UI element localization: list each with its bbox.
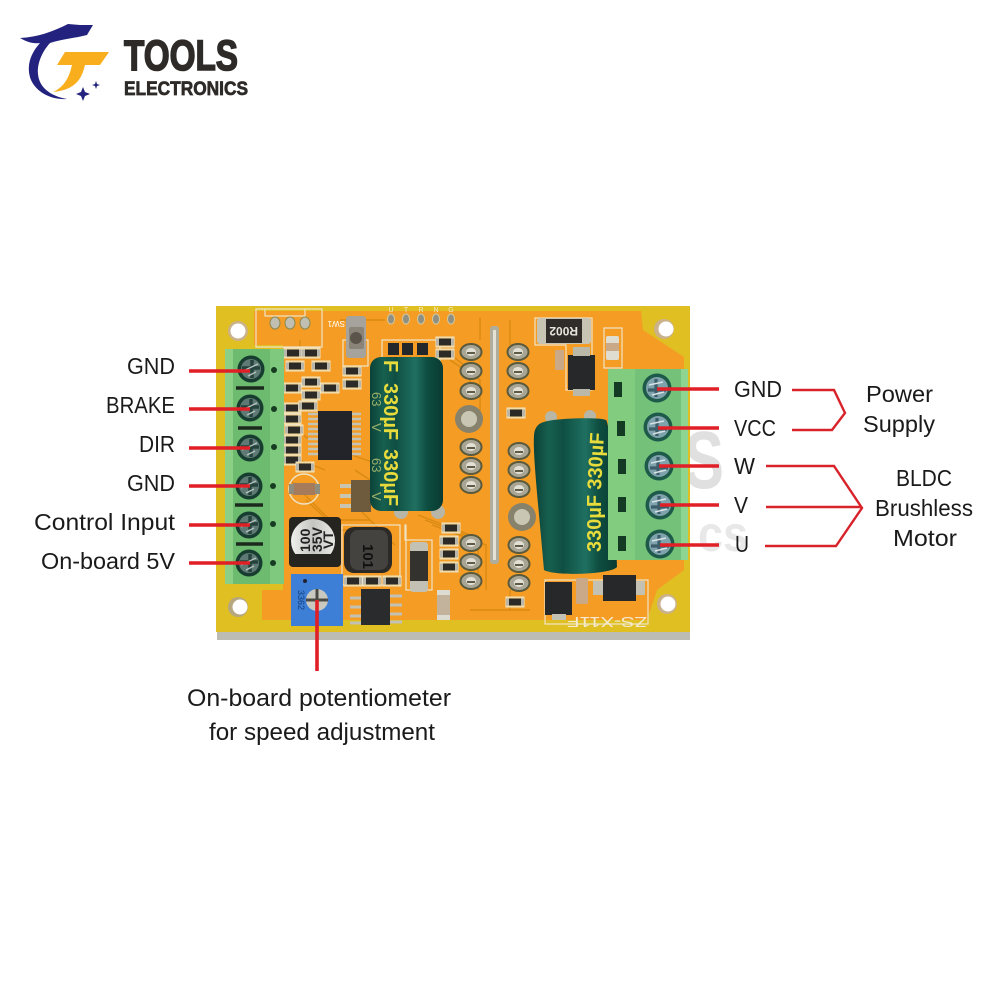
board orange copper area [254,311,684,620]
left pin labels: GND [127,353,175,379]
capacitor 330uF left: 63 [369,392,384,406]
left pin labels: On-board 5V [41,548,175,574]
blue potentiometer [291,574,343,626]
board metal edge [217,626,690,640]
potentiometer label: for speed adjustment [209,719,435,746]
mounting holes [228,319,677,617]
blue potentiometer: 3362 [296,590,306,610]
right pin labels: V [734,492,748,518]
watermark text behind board: S [684,415,724,506]
BLDC motor label: Motor [893,525,957,551]
right pointer lines [657,389,719,545]
capacitor 330uF right [534,410,617,574]
small SMD components [283,337,525,607]
motor bracket [765,466,862,546]
capacitor 330uF left: 63 [369,458,384,472]
potentiometer pointer line [315,600,319,671]
right green screw terminal [608,369,688,560]
logo icon: orange T [53,52,109,92]
potentiometer label [187,685,451,746]
solder pads column right of wire [508,344,536,591]
header pads and labels top: R [418,307,424,314]
watermark text behind board [684,415,748,562]
vertical shunt wire [490,326,499,564]
left pin labels [34,353,175,574]
solder pads column left of wire [455,344,483,589]
right pin labels [734,376,782,557]
tact switch: SW1 [327,319,345,328]
capacitor 330uF left: 330µF [379,383,401,440]
bottom diodes [545,575,645,620]
power inductor 101 [344,527,392,573]
PCB mark ZS-X11F: ZS-X11F [567,613,647,630]
capacitor 330uF left: 330µF [379,449,401,506]
small transistors row [388,343,428,355]
BLDC motor label: BLDC [896,465,952,491]
left green screw terminal [225,349,284,584]
power supply bracket [792,390,845,430]
left pointer lines [189,371,250,563]
logo: Tools Electronics [20,24,248,101]
left pin labels: BRAKE [106,392,175,418]
capacitor 330uF left: V [369,492,384,501]
logo wordmark: TOOLS: TOOLS [124,32,238,80]
diode SMD [410,542,428,592]
BLDC motor label: Brushless [875,495,973,521]
header pads and labels top: U [388,307,394,314]
capacitor 330uF right: 330µF [584,432,609,490]
capacitor 330uF left [369,357,445,519]
right pin labels: W [734,453,756,479]
3-pin pads top left [270,317,310,329]
potentiometer label: On-board potentiometer [187,685,451,712]
ceramic capacitor top [606,336,619,360]
right pin labels: GND [734,376,782,402]
power inductor 101: 101 [359,544,376,569]
left pin labels: Control Input [34,509,175,535]
header pads and labels top: G [448,307,454,314]
right pin labels: VCC [734,415,776,441]
logo icon: blue swoosh [20,24,93,99]
capacitor 330uF right: 330µF [584,495,606,552]
silkscreen outlines [256,309,648,624]
circuit board [216,306,690,640]
left pin labels: DIR [139,431,175,457]
board traces [290,318,530,610]
small ring capacitor [289,474,320,504]
tab transistor [340,480,371,512]
electrolytic capacitor 100 35V: 100 [297,528,313,552]
capacitor 330uF left: V [369,423,384,432]
power supply label [863,381,935,437]
power supply label: Power [866,381,933,407]
SOP8 IC bottom [350,589,402,625]
power transistor top [568,347,595,396]
electrolytic capacitor 100 35V [289,517,341,567]
shunt resistor R002: R002 [549,324,578,338]
tact switch [327,316,366,358]
header pads and labels top: T [404,307,409,314]
board yellow base [216,306,690,632]
shunt resistor R002 [537,318,591,344]
electrolytic capacitor 100 35V: VT [320,531,336,549]
capacitor 330uF left: F [379,360,401,372]
logo icon: stars [76,81,100,101]
watermark text behind board: cs [698,506,748,562]
power supply label: Supply [863,411,935,437]
electrolytic capacitor 100 35V: 35V [309,526,325,552]
SOP IC driver chip [308,411,361,460]
ceramic capacitor mid [555,350,564,370]
right pin labels: U [735,531,749,557]
header pads and labels top: N [433,307,439,314]
logo wordmark: ELECTRONICS: ELECTRONICS [124,79,248,100]
BLDC motor label [875,465,973,551]
header pads and labels top [388,307,454,324]
left pin labels: GND [127,470,175,496]
ceramic capacitor small [437,590,450,620]
